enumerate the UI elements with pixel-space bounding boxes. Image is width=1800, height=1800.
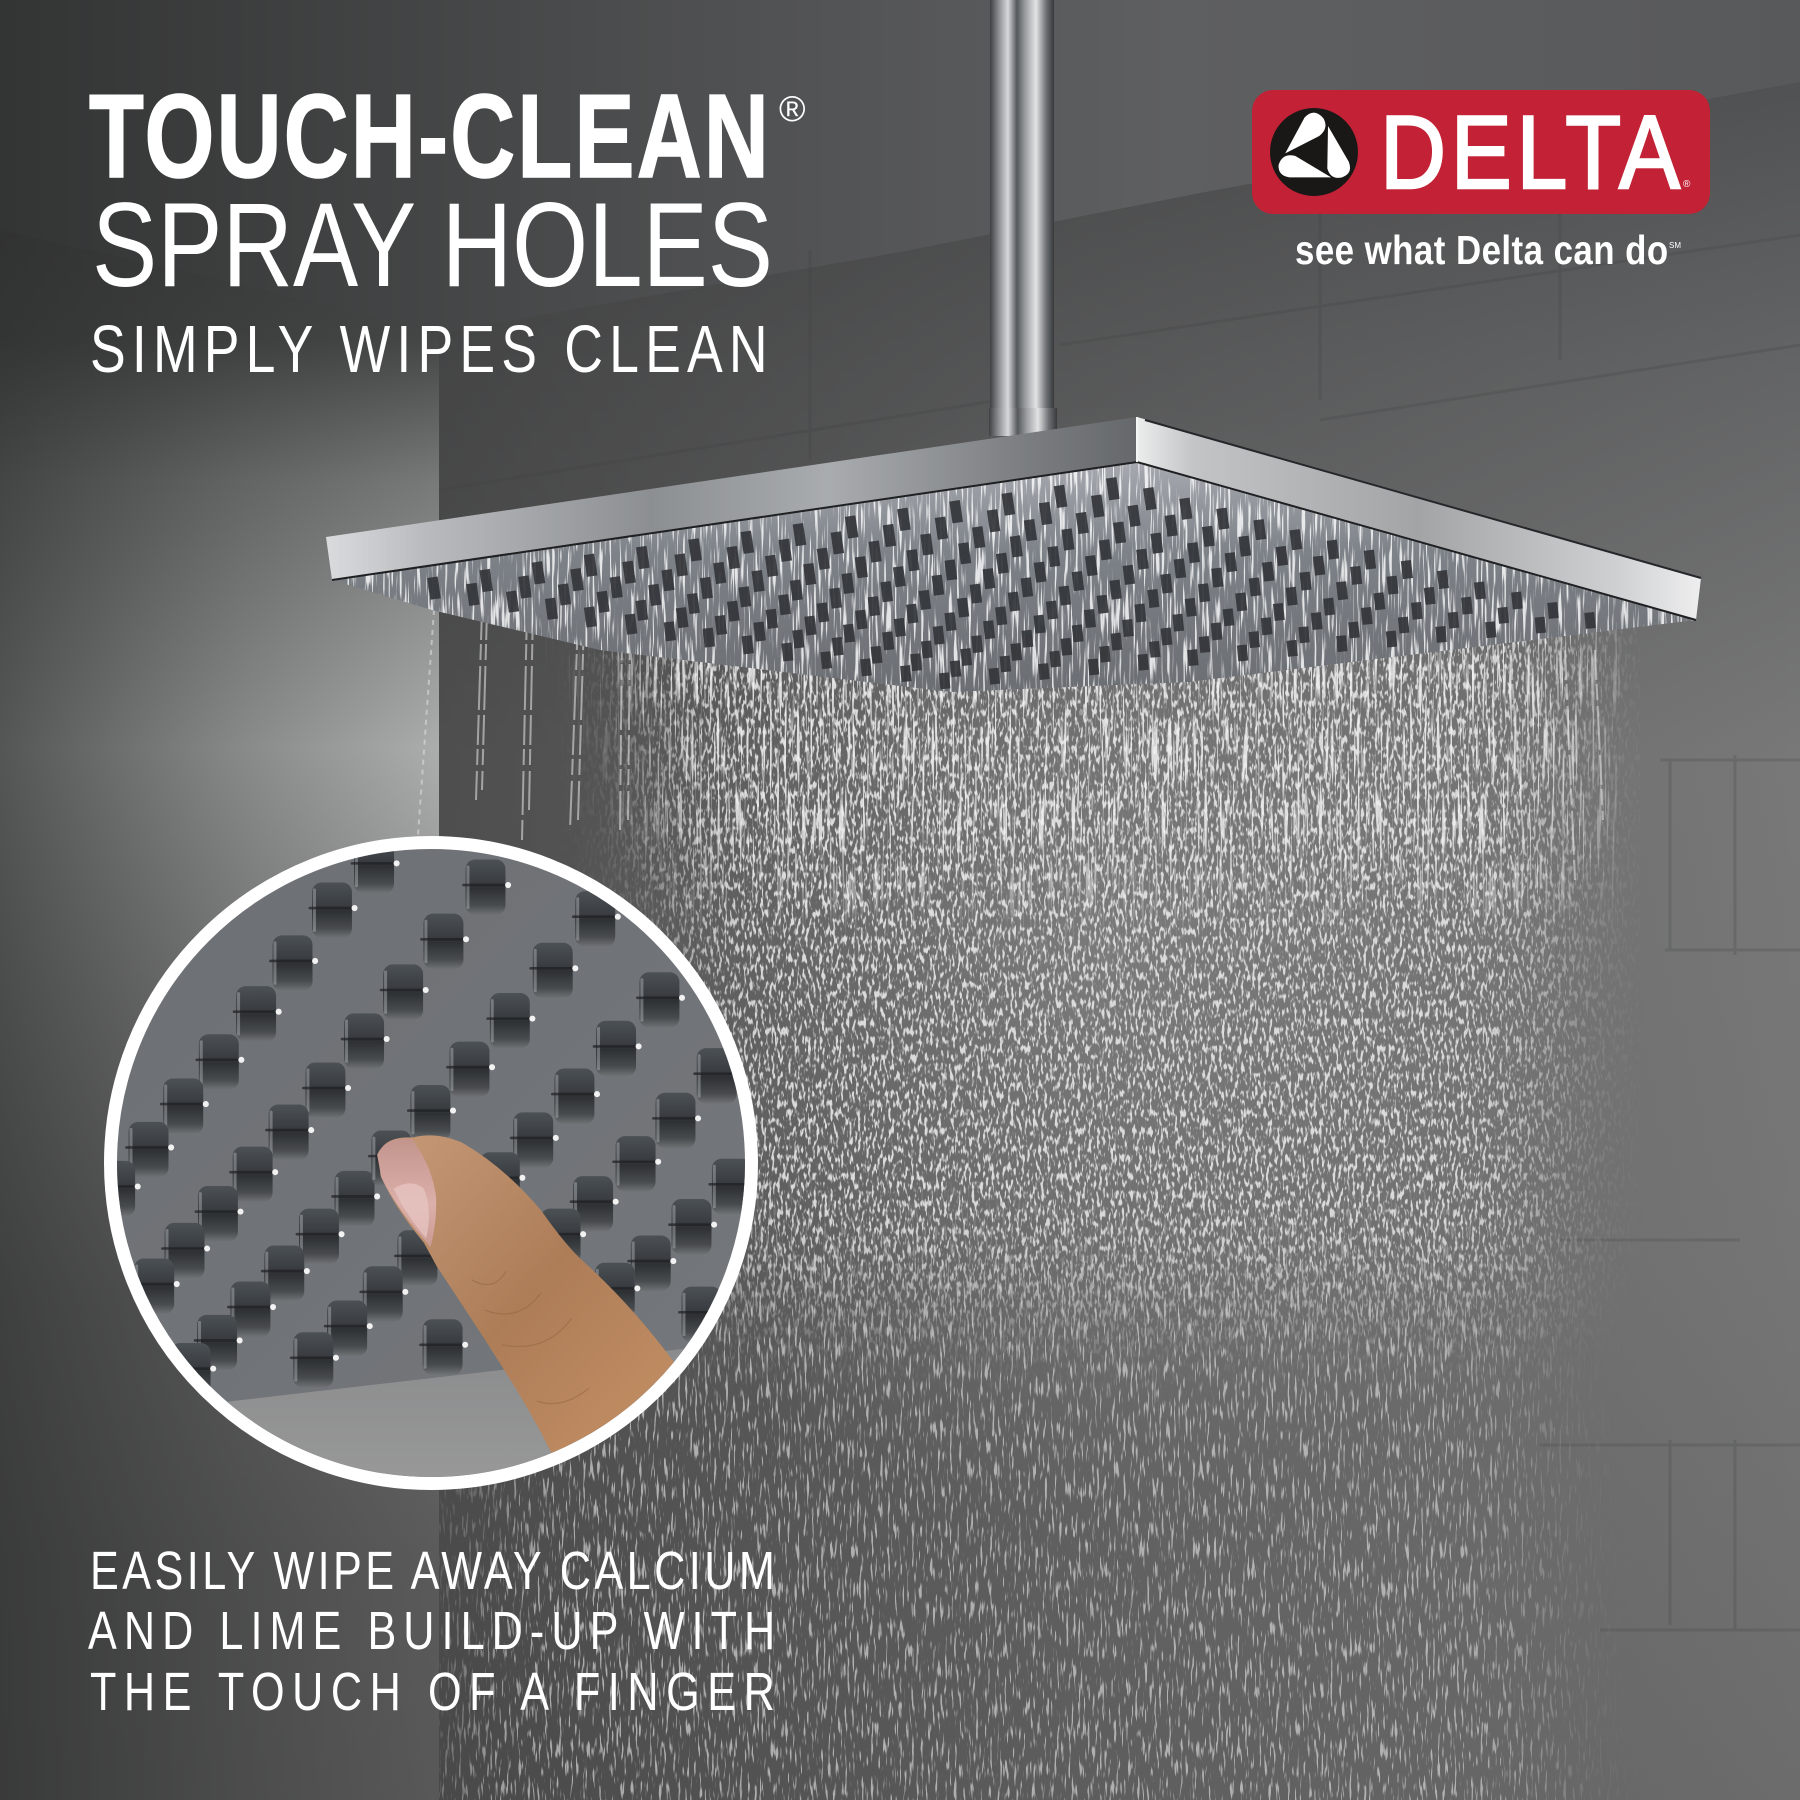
tagline: see what Delta can do [1295,228,1668,274]
left chrome face [326,417,1137,580]
underside with spray nozzles [320,455,1710,700]
callout ring [110,842,752,1484]
logo icon [1270,108,1358,196]
close-up nozzles [117,851,745,1477]
shower pipe [989,0,1057,436]
logo wordmark: DELTA [1380,94,1681,210]
heading: Spray Holes: SPRAY HOLES [92,178,773,312]
body copy [88,1542,775,1722]
line 1: EASILY WIPE AWAY CALCIUM [90,1542,775,1601]
line 3: THE TOUCH OF A FINGER [90,1663,775,1722]
service mark: SM [1669,241,1681,250]
registered mark: ® [779,88,806,129]
callout: close-up of nozzles and finger [92,838,760,1500]
logo: Delta [1252,90,1710,274]
logo registered mark: ® [1683,179,1691,190]
logo badge [1252,90,1710,214]
line 2: AND LIME BUILD-UP WITH [88,1602,775,1661]
right chrome face [1137,417,1701,620]
water spray [417,610,1632,1800]
subheading: SIMPLY WIPES CLEAN [90,311,768,386]
title block [89,70,806,386]
heading: Touch-Clean: TOUCH-CLEAN [89,70,771,203]
shower head [320,417,1710,700]
finger [377,1135,674,1453]
